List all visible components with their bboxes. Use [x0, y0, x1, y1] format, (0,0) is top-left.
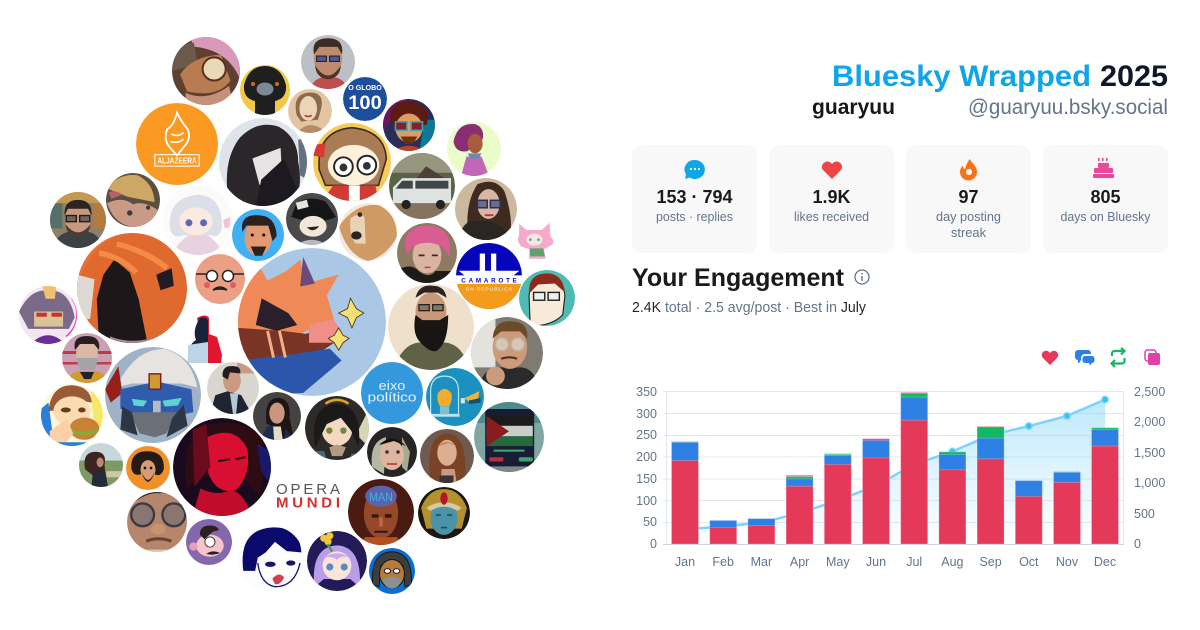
month labels: May — [826, 555, 850, 569]
avatar: black hair woman — [219, 118, 307, 206]
icon: info — [855, 270, 869, 284]
avatar: curly man on orange — [126, 446, 170, 490]
avatar: woman with blue glasses — [455, 178, 517, 240]
right axis labels — [1134, 385, 1165, 551]
avatar: long brown hair woman — [420, 429, 474, 483]
avatar: pink cat girl sticker — [518, 223, 553, 259]
icon: speech bubble — [684, 160, 705, 179]
left axis labels: 150 — [636, 472, 657, 486]
month labels: Jun — [866, 555, 886, 569]
avatar: man with mustache and hand on chin — [471, 317, 543, 389]
avatar: half red bust — [188, 316, 222, 363]
right axis labels: 1,500 — [1134, 446, 1165, 460]
stat label: likes received: likes received — [794, 210, 869, 224]
avatar: Camarote da Republica logo: DA REPÚBLICA — [466, 286, 513, 293]
bar: Apr — [786, 475, 813, 544]
month labels: Apr — [790, 555, 809, 569]
display name: guaryuu — [812, 96, 895, 119]
avatar: sketch woman — [288, 89, 332, 133]
avatar: pink hat girl — [172, 37, 240, 105]
right axis labels: 2,500 — [1134, 385, 1165, 399]
avatar: purple hair anime — [19, 286, 78, 344]
right axis labels: 2,000 — [1134, 415, 1165, 429]
icon: heart — [822, 161, 842, 179]
stat label: day posting streak: day posting — [936, 210, 1001, 224]
month labels: Aug — [941, 555, 964, 569]
avatar: blue woman with gold crown — [418, 487, 470, 539]
right axis labels: 0 — [1134, 537, 1141, 551]
avatar cluster — [19, 35, 575, 594]
bar: Oct — [1015, 481, 1042, 544]
stat value: posts and replies: 153 · 794 — [656, 187, 732, 207]
avatar: O Globo 100 logo — [343, 77, 387, 121]
cumulative line — [685, 396, 1108, 530]
bar: Sep — [977, 426, 1004, 544]
month labels: Jul — [906, 555, 922, 569]
title: 2025 — [1100, 60, 1168, 93]
avatar: O Globo 100 logo: O GLOBO — [348, 83, 382, 92]
stat label: day posting streak: streak — [951, 226, 987, 240]
avatar: purple hair anime with flower — [307, 531, 367, 591]
avatar: Camarote da Republica logo: CAMAROTE — [461, 277, 517, 284]
avatar: white van in woods — [389, 153, 455, 219]
avatar: lightbulb in a cage — [426, 368, 484, 426]
chart: monthly engagement — [636, 385, 1165, 569]
grid lines — [663, 391, 1124, 544]
avatar: bearded man — [388, 284, 474, 370]
avatar: man with round glasses close up — [127, 492, 187, 552]
left axis labels: 200 — [636, 450, 657, 464]
left axis labels — [636, 385, 657, 551]
legend icons — [1042, 348, 1160, 367]
avatar: dreadlocks cartoon — [369, 548, 415, 594]
avatar: purple background cartoon man — [186, 519, 232, 565]
month labels: Oct — [1019, 555, 1039, 569]
month labels: Jan — [675, 555, 695, 569]
avatar: Opera Mundi wordmark: OPERA — [276, 481, 340, 498]
month labels: Dec — [1094, 555, 1116, 569]
left axis labels: 100 — [636, 494, 657, 508]
stat card: posts and replies — [632, 145, 757, 253]
avatar: Palestine flag phone — [474, 402, 544, 472]
title: Bluesky Wrapped — [832, 60, 1091, 93]
right axis labels: 500 — [1134, 507, 1155, 521]
avatar: gray streak hair woman — [367, 427, 417, 477]
month labels: Mar — [751, 555, 772, 569]
bar: Jun — [862, 439, 890, 544]
stat card: day posting streak — [906, 145, 1031, 253]
avatar: Eixo Politico logo — [361, 362, 423, 424]
avatar: sunglasses cartoon man — [383, 99, 435, 151]
stat value: streak: 97 — [958, 187, 979, 207]
left axis labels: 250 — [636, 428, 657, 442]
avatar: MAN brain portrait — [348, 479, 414, 545]
stat label: days on Bluesky: days on Bluesky — [1060, 210, 1151, 224]
avatar: magenta hair girl — [447, 122, 501, 176]
left axis labels: 350 — [636, 385, 657, 399]
engagement summary: 2.4K total · 2.5 avg/post · Best in July — [632, 300, 867, 316]
bar: Jan — [672, 441, 698, 544]
avatar: cartoon with top hat — [286, 193, 338, 245]
avatar: emu — [240, 65, 290, 115]
bar: Jul — [901, 392, 928, 544]
avatar: man with glasses, city — [50, 192, 106, 248]
avatar: blue cartoon bearded man — [232, 209, 284, 261]
bar: Dec — [1092, 428, 1118, 544]
month labels: Nov — [1056, 555, 1079, 569]
avatar: Al Jazeera logo — [136, 103, 218, 185]
cumulative area — [685, 400, 1105, 544]
avatar: O Globo 100 logo: 100 — [348, 92, 382, 114]
stat value: days: 805 — [1090, 187, 1121, 207]
bar: Mar — [748, 519, 775, 544]
stat label: posts and replies: posts · replies — [656, 210, 733, 224]
bar: Feb — [710, 520, 737, 544]
left axis labels: 0 — [650, 537, 657, 551]
avatar: MAN brain portrait: MAN — [369, 490, 393, 504]
bar: May — [824, 454, 851, 544]
avatar: man with gray shirt — [301, 35, 355, 89]
icon: legend replies — [1075, 350, 1094, 366]
avatar: pink hair woman — [397, 223, 457, 283]
avatar: mustache cartoon on salmon — [195, 254, 245, 304]
avatar: black hair anime girl — [305, 396, 369, 460]
month labels — [675, 555, 1116, 569]
icon: cake — [1093, 158, 1114, 178]
left axis labels: 300 — [636, 407, 657, 421]
bar: Aug — [939, 452, 966, 544]
avatar: golden dog — [339, 203, 397, 261]
avatar: Camarote da Republica logo — [456, 243, 522, 310]
avatar: Eixo Politico logo: político — [368, 390, 416, 405]
avatar: black cat in orange wig — [77, 233, 187, 343]
heading: Your Engagement: Your Engagement — [632, 264, 845, 292]
avatar: curly woman by landscape — [79, 443, 123, 487]
icon: legend quotes — [1145, 350, 1160, 365]
avatar: suit man — [207, 362, 259, 414]
month labels: Feb — [712, 555, 734, 569]
icon: legend heart — [1042, 351, 1058, 365]
right axis labels: 1,000 — [1134, 476, 1165, 490]
stat value: likes: 1.9K — [812, 187, 851, 207]
avatar: chibi girl with glasses — [313, 123, 391, 201]
stat card: likes received — [769, 145, 894, 253]
avatar: Opera Mundi wordmark — [276, 481, 340, 512]
icon: legend repost — [1112, 348, 1124, 367]
left axis labels: 50 — [643, 515, 657, 529]
avatar: dog and face selfie — [106, 173, 160, 227]
avatar: woman in red light — [173, 418, 271, 516]
avatar: teal cartoon with glasses — [519, 270, 575, 326]
avatar: white hair anime — [170, 194, 230, 255]
avatar: man with silver mask — [62, 333, 112, 383]
avatar: Al Jazeera logo: ALJAZEERA — [157, 157, 197, 166]
avatar: smiling woman dark background — [253, 392, 301, 440]
bar: Nov — [1054, 471, 1080, 544]
month labels: Sep — [979, 555, 1002, 569]
handle: @guaryuu.bsky.social — [968, 96, 1168, 119]
stat card: days on Bluesky — [1043, 145, 1168, 253]
avatar: Opera Mundi wordmark: MUNDI — [276, 494, 340, 512]
avatar: Chun-Li eating burger — [41, 384, 103, 446]
avatar: Eixo Politico logo: eixo — [379, 378, 405, 393]
avatar: navy hair hand-drawn face — [238, 526, 304, 592]
avatar: fox furry hugging large — [238, 248, 386, 396]
icon: flame — [960, 159, 977, 180]
stat label: day posting streak — [936, 210, 1001, 240]
avatar: robot with santa hat — [105, 347, 201, 443]
